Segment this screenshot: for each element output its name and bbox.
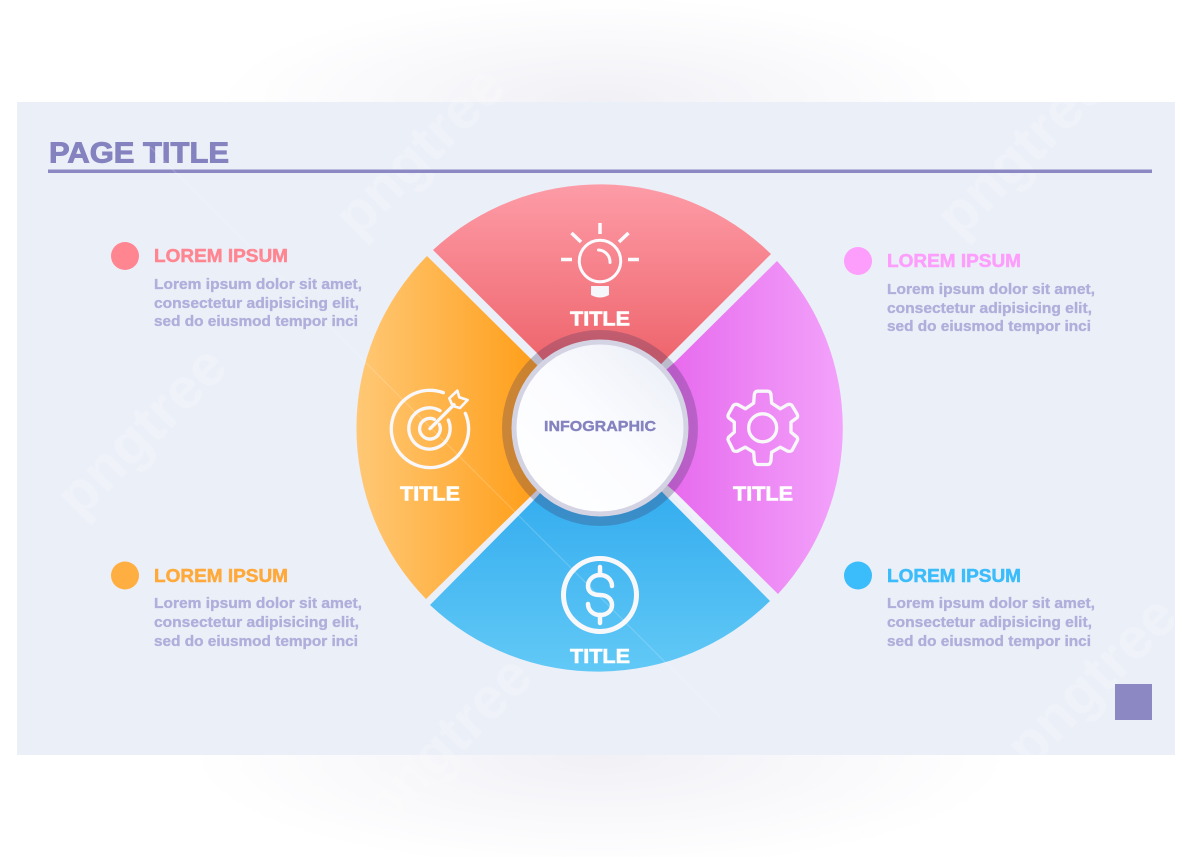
- text block: bottom left: [111, 562, 362, 650]
- text block: top left: consectetur adipisicing elit,: [154, 296, 359, 312]
- text block: bottom right: LOREM IPSUM: [887, 565, 1021, 586]
- text block: bottom left: consectetur adipisicing elit,: [154, 615, 359, 631]
- label: right title: TITLE: [733, 484, 793, 506]
- text block: top right: sed do eiusmod tempor inci: [887, 319, 1091, 335]
- page title: PAGE TITLE: [49, 138, 229, 170]
- segment: left orange: [356, 256, 600, 599]
- segmented circle chart: [356, 184, 843, 672]
- text block: top right: Lorem ipsum dolor sit amet,: [887, 282, 1095, 298]
- segment: bottom blue: [430, 428, 770, 672]
- icon: gear: [728, 391, 798, 464]
- text block: top right: consectetur adipisicing elit,: [887, 301, 1092, 317]
- text block: bottom left: LOREM IPSUM: [154, 565, 288, 586]
- label: left title: TITLE: [400, 484, 460, 506]
- text block: bottom right: [844, 562, 1095, 650]
- page title: [48, 138, 1152, 173]
- text block: bottom right: Lorem ipsum dolor sit amet,: [887, 596, 1095, 612]
- corner square: [1115, 684, 1152, 720]
- watermark: pngtree: [348, 643, 545, 839]
- icon: light bulb: [561, 223, 639, 298]
- watermark: pngtree: [43, 333, 240, 529]
- icon: dollar coin: [564, 558, 636, 632]
- watermark: pngtree: [993, 583, 1190, 779]
- label: bottom title: TITLE: [570, 646, 630, 668]
- text block: bottom right: consectetur adipisicing elit,: [887, 615, 1092, 631]
- text block: bottom left: Lorem ipsum dolor sit amet,: [154, 596, 362, 612]
- inner dark ring: [507, 335, 693, 521]
- center circle: INFOGRAPHIC: [544, 418, 656, 435]
- text block: top right: LOREM IPSUM: [887, 250, 1021, 271]
- segment: top red: [433, 184, 771, 428]
- center circle: [512, 340, 688, 516]
- text block: top left: LOREM IPSUM: [154, 245, 288, 266]
- background panel: [17, 102, 1175, 755]
- label: top title: TITLE: [570, 308, 630, 330]
- icon: target with arrow: [391, 390, 469, 468]
- text block: bottom left: sed do eiusmod tempor inci: [154, 634, 358, 650]
- text block: top right: [844, 247, 1095, 335]
- watermark: pngtree: [923, 53, 1120, 249]
- panel shadow: [190, 0, 1010, 857]
- text block: top left: sed do eiusmod tempor inci: [154, 314, 358, 330]
- watermark: pngtree: [321, 53, 518, 249]
- text block: top left: Lorem ipsum dolor sit amet,: [154, 277, 362, 293]
- text block: bottom right: sed do eiusmod tempor inci: [887, 634, 1091, 650]
- watermark: pngtree: [653, 333, 850, 529]
- text block: top left: [111, 242, 362, 330]
- segment: right magenta: [600, 261, 843, 594]
